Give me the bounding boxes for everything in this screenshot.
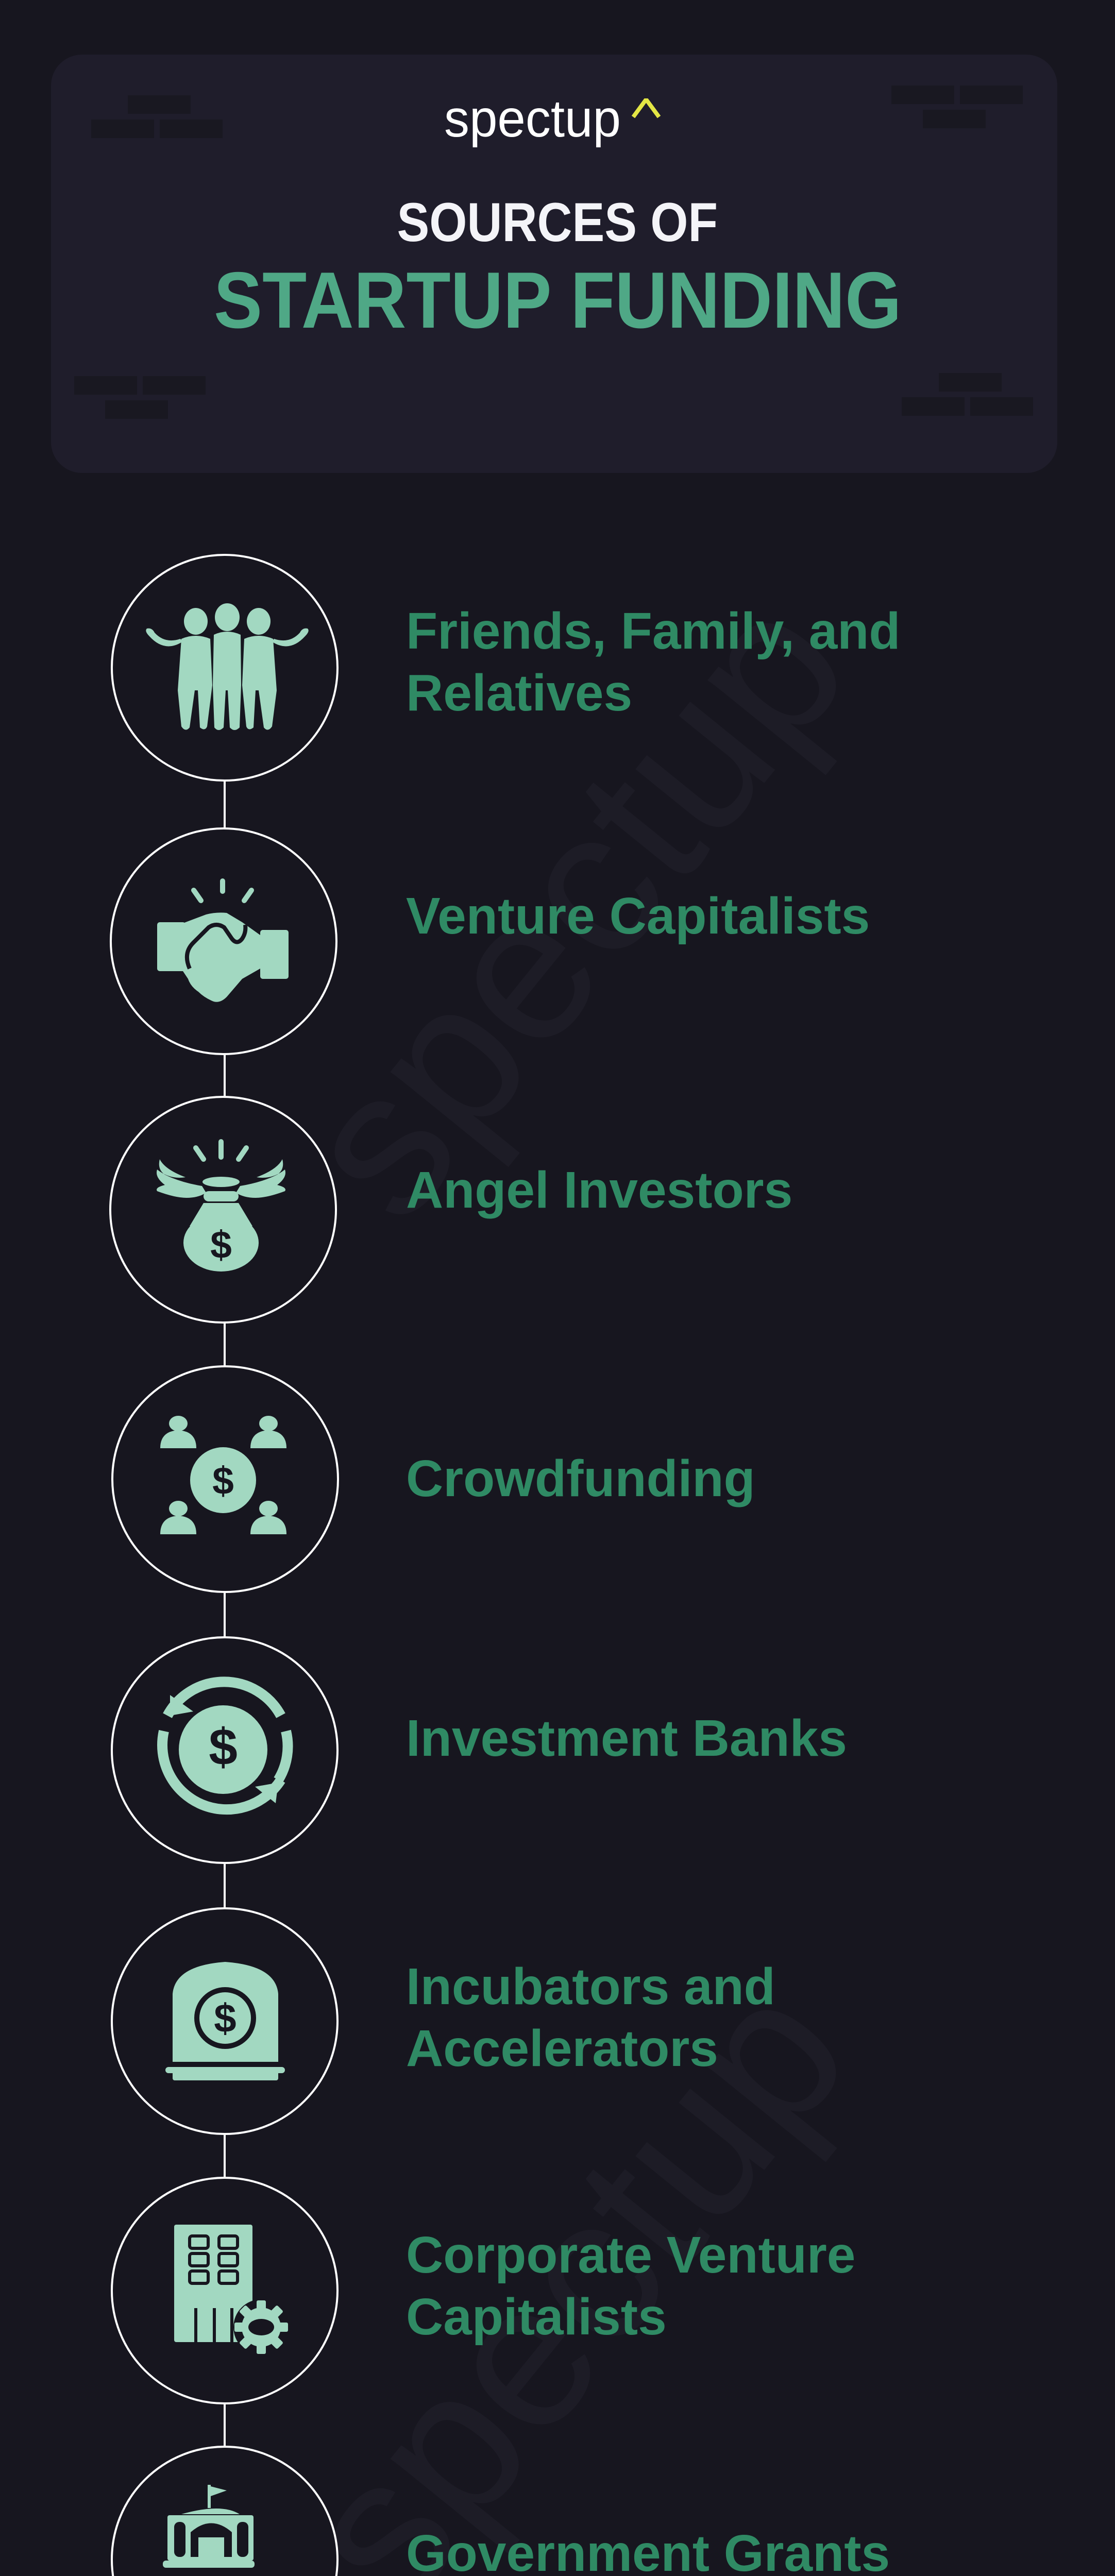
header panel bbox=[51, 55, 1057, 473]
item 4 text: Crowdfunding bbox=[406, 1450, 755, 1507]
item 7 text: Corporate Venture bbox=[406, 2226, 855, 2284]
circle 2 bbox=[111, 828, 336, 1054]
item 6 text: Accelerators bbox=[406, 2020, 718, 2077]
circle 6 bbox=[112, 1908, 337, 2134]
item 1 text: Relatives bbox=[406, 664, 632, 722]
header logo: spectup bbox=[444, 89, 621, 148]
icon: crowdfunding: $ bbox=[212, 1459, 234, 1502]
title line 1: SOURCES OF bbox=[397, 191, 718, 253]
title line 2: STARTUP FUNDING bbox=[214, 256, 901, 345]
icon: investment bank cycle bbox=[162, 1682, 288, 1809]
item 3 text: Angel Investors bbox=[406, 1161, 792, 1219]
icon: handshake bbox=[157, 881, 289, 1002]
icon: friends group bbox=[146, 603, 309, 730]
item 6 text: Incubators and bbox=[406, 1958, 775, 2015]
icon: government building with money bbox=[163, 2485, 296, 2576]
item 1 text bbox=[406, 602, 900, 722]
icon: incubator: $ bbox=[214, 1995, 236, 2041]
icon: investment bank cycle: $ bbox=[209, 1718, 238, 1776]
icon: incubator bbox=[165, 1962, 285, 2080]
circle 4 bbox=[112, 1366, 338, 1592]
icon: angel money bag bbox=[157, 1142, 285, 1272]
item 6 text bbox=[406, 1958, 775, 2077]
circle 8 bbox=[112, 2447, 337, 2576]
item 1 text: Friends, Family, and bbox=[406, 602, 900, 660]
item 2 text: Venture Capitalists bbox=[406, 887, 870, 945]
item 7 text: Capitalists bbox=[406, 2288, 667, 2346]
circle 7 bbox=[112, 2178, 337, 2403]
icon: crowdfunding bbox=[160, 1416, 286, 1534]
circle 1 bbox=[112, 555, 337, 781]
circle 3 bbox=[110, 1097, 336, 1323]
circle 5 bbox=[112, 1637, 337, 1863]
icon: angel money bag: $ bbox=[210, 1223, 232, 1266]
watermark: spectup upper: spectup bbox=[257, 553, 890, 1259]
item 7 text bbox=[406, 2226, 855, 2346]
icon: corporate building with gear bbox=[174, 2225, 289, 2355]
item 5 text: Investment Banks bbox=[406, 1709, 847, 1767]
